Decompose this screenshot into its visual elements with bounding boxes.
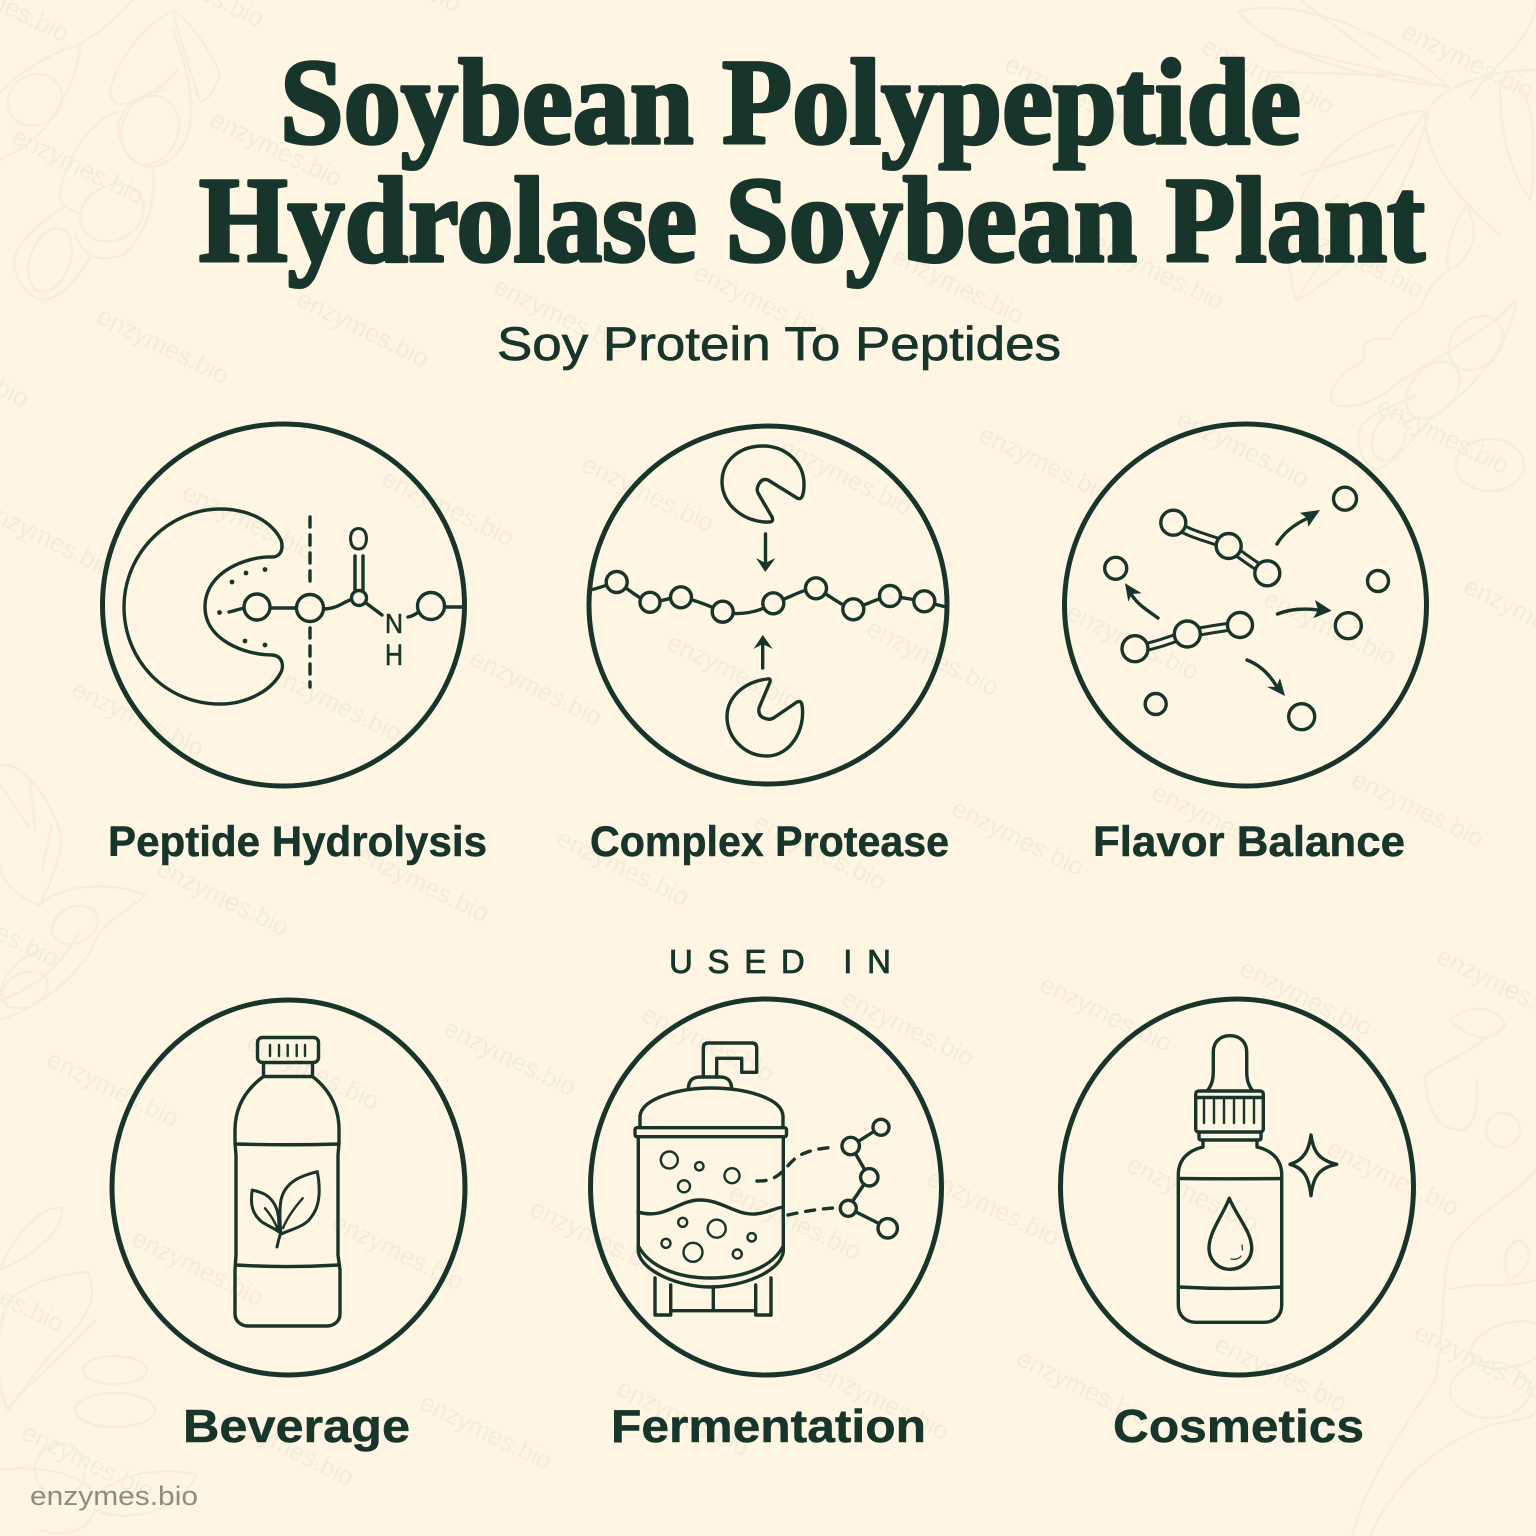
enzymes.bio watermark pattern: enzymes.bio [7, 122, 148, 210]
chain residues [244, 590, 444, 622]
peptide chain [229, 600, 465, 617]
enzymes.bio watermark pattern: enzymes.bio [205, 105, 346, 193]
atom labels: O [348, 521, 369, 557]
enzymes.bio watermark pattern: enzymes.bio [1259, 584, 1400, 672]
enzymes.bio watermark pattern: enzymes.bio [812, 1358, 953, 1446]
label: flavor balance: Flavor Balance [1093, 818, 1405, 866]
panel: flavor balance [1064, 424, 1426, 786]
enzymes.bio watermark pattern: enzymes.bio [465, 644, 606, 732]
cap ridges [1204, 1100, 1254, 1123]
enzymes.bio watermark pattern: enzymes.bio [525, 1194, 666, 1282]
enzymes.bio watermark pattern: enzymes.bio [377, 464, 518, 552]
atom labels: H [385, 639, 403, 672]
icon ring [590, 999, 942, 1375]
enzymes.bio watermark pattern: enzymes.bio [327, 1208, 468, 1296]
enzymes.bio watermark pattern: enzymes.bio [922, 1164, 1063, 1252]
enzymes.bio watermark pattern: enzymes.bio [1397, 17, 1536, 105]
enzymes.bio watermark pattern: enzymes.bio [67, 675, 208, 763]
icon: leaf [251, 1172, 319, 1247]
icon ring [589, 426, 947, 784]
icon: product molecule [840, 1119, 897, 1238]
panel labels: bottom row [183, 1400, 1364, 1452]
panel: peptide hydrolysis [102, 424, 465, 786]
label: complex protease: Complex Protease [590, 818, 949, 866]
arrow: down [756, 534, 776, 572]
enzymes.bio watermark pattern: enzymes.bio [1347, 765, 1488, 853]
enzymes.bio watermark pattern: enzymes.bio [17, 1418, 158, 1506]
enzymes.bio watermark pattern: enzymes.bio [217, 1404, 358, 1492]
title [199, 35, 1425, 288]
enzymes.bio watermark pattern: enzymes.bio [1372, 392, 1513, 480]
enzymes.bio watermark pattern: enzymes.bio [974, 420, 1115, 508]
title: Soybean Polypeptide [280, 35, 1301, 170]
heading: used in: USED IN [669, 943, 891, 980]
icon ring [1064, 424, 1426, 786]
peptide bond cleavage line [308, 517, 312, 687]
panel: beverage [112, 1000, 465, 1375]
icon ring [1060, 999, 1414, 1375]
icon: sparkle [1290, 1135, 1337, 1196]
chain and free residues [1105, 487, 1388, 730]
panel: complex protease [589, 426, 947, 784]
enzymes.bio watermark pattern: enzymes.bio [292, 285, 433, 373]
enzymes.bio watermark pattern: enzymes.bio [42, 1045, 183, 1133]
enzymes.bio watermark pattern: enzymes.bio [1087, 228, 1228, 316]
enzymes.bio watermark pattern: enzymes.bio [265, 660, 406, 748]
enzymes.bio watermark pattern: enzymes.bio [352, 840, 493, 928]
enzymes.bio watermark pattern: enzymes.bio [1322, 1134, 1463, 1222]
arrow: up [754, 635, 773, 668]
icon: drop [1209, 1198, 1252, 1269]
enzymes.bio watermark pattern: enzymes.bio [837, 984, 978, 1072]
icon: bottle [235, 1038, 340, 1326]
enzymes.bio watermark pattern: enzymes.bio [862, 614, 1003, 702]
enzymes.bio watermark pattern: enzymes.bio [177, 478, 318, 566]
enzymes.bio watermark pattern: enzymes.bio [887, 242, 1028, 330]
icon: fermenter tank [635, 1043, 786, 1315]
label: beverage: Beverage [183, 1400, 410, 1452]
bottle cap ridges [270, 1045, 305, 1056]
panel: cosmetics [1060, 999, 1414, 1375]
atom labels [348, 521, 403, 672]
enzymes.bio watermark pattern: enzymes.bio [1172, 405, 1313, 493]
enzymes.bio watermark pattern: enzymes.bio [92, 302, 233, 390]
enzymes.bio watermark pattern: enzymes.bio [612, 1374, 753, 1462]
icon: dropper bottle [1178, 1036, 1282, 1322]
tank bubbles [661, 1152, 756, 1262]
enzymes.bio watermark pattern: enzymes.bio [242, 1028, 383, 1116]
label: fermentation: Fermentation [611, 1400, 926, 1452]
peptide fragment bonds [1135, 523, 1267, 649]
enzymes.bio watermark pattern: enzymes.bio [947, 794, 1088, 882]
peptide chain [590, 582, 947, 614]
enzymes.bio watermark pattern: enzymes.bio [415, 1388, 556, 1476]
label: peptide hydrolysis: Peptide Hydrolysis [108, 818, 487, 866]
enzymes.bio watermark pattern: enzymes.bio [1062, 598, 1203, 686]
enzymes.bio watermark pattern: enzymes.bio [552, 824, 693, 912]
subtitle: Soy Protein To Peptides [497, 317, 1061, 370]
enzymes.bio watermark pattern: enzymes.bio [724, 1178, 865, 1266]
icon: top protease [722, 446, 804, 522]
enzymes.bio watermark pattern: enzymes.bio [662, 628, 803, 716]
enzymes.bio watermark pattern: enzymes.bio [127, 1224, 268, 1312]
enzymes.bio watermark pattern: enzymes.bio [689, 258, 830, 346]
enzymes.bio watermark pattern: enzymes.bio [1147, 778, 1288, 866]
icon ring [102, 424, 464, 786]
footer brand mark: enzymes.bio [30, 1481, 198, 1511]
enzymes.bio watermark pattern: enzymes.bio [439, 1014, 580, 1102]
enzymes.bio watermark pattern: enzymes.bio [1197, 32, 1338, 120]
title: Hydrolase Soybean Plant [199, 153, 1425, 288]
enzymes.bio watermark pattern: enzymes.bio [577, 450, 718, 538]
dashed output paths [757, 1147, 835, 1215]
active site dots [217, 567, 267, 647]
label: cosmetics: Cosmetics [1113, 1400, 1364, 1452]
enzymes.bio watermark pattern: enzymes.bio [1210, 1330, 1351, 1418]
enzymes.bio watermark pattern: enzymes.bio [1035, 970, 1176, 1058]
panel labels: top row [108, 818, 1405, 866]
icon: bottom protease [727, 679, 803, 756]
enzymes.bio watermark pattern: enzymes.bio [1122, 1150, 1263, 1238]
enzymes.bio watermark pattern: enzymes.bio [489, 272, 630, 360]
icon ring [112, 1000, 465, 1375]
atom labels: N [385, 608, 403, 639]
enzymes.bio watermark pattern: enzymes.bio [1287, 216, 1428, 304]
chain residues [606, 572, 935, 622]
panel: fermentation [590, 999, 942, 1375]
enzymes.bio watermark pattern: enzymes.bio [152, 854, 293, 942]
enzymes.bio watermark pattern: enzymes.bio [775, 433, 916, 521]
enzymes.bio watermark pattern: enzymes.bio [637, 1000, 778, 1088]
enzymes.bio watermark pattern: enzymes.bio [1000, 50, 1141, 138]
carbonyl double bond [355, 556, 363, 590]
enzymes.bio watermark pattern: enzymes.bio [1235, 954, 1376, 1042]
enzymes.bio watermark pattern: enzymes.bio [1012, 1344, 1153, 1432]
enzymes.bio watermark pattern: enzymes.bio [749, 808, 890, 896]
icon: enzyme with active site [124, 509, 282, 704]
arrows: peptide release [1125, 510, 1332, 696]
